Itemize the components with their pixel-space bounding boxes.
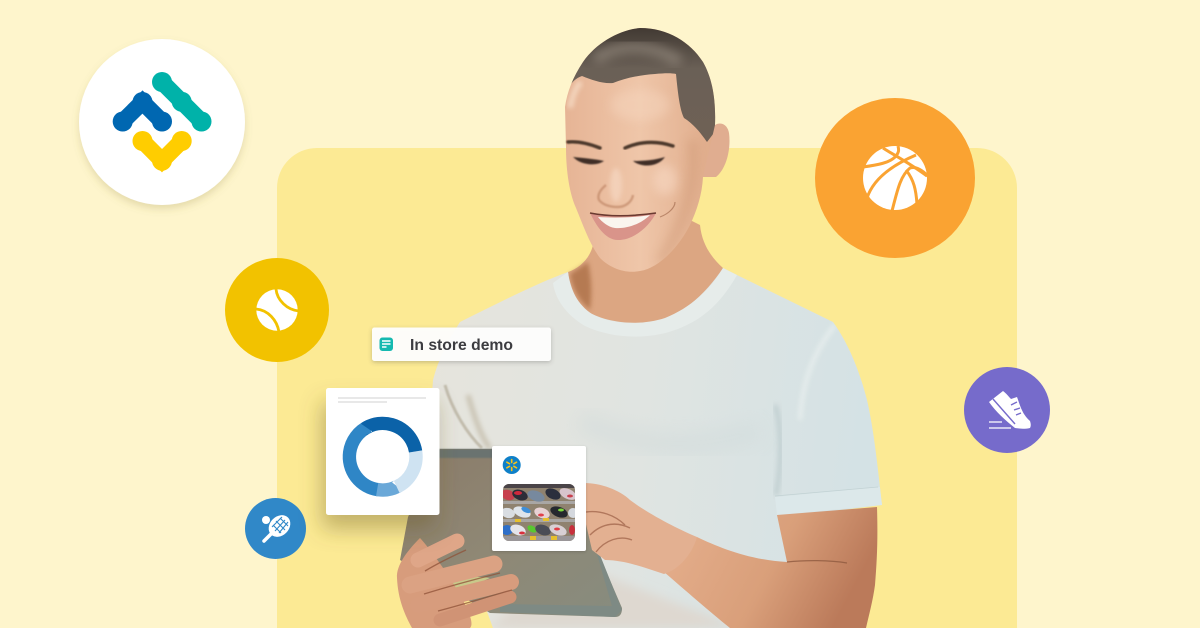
icon: tennis racket <box>245 498 306 559</box>
icon: retailer spark <box>503 456 521 474</box>
panel: yellow backdrop <box>277 148 1017 628</box>
finger 2 <box>410 564 494 585</box>
photo: shoe wall <box>500 484 578 541</box>
finger divisions <box>424 550 512 611</box>
right arm <box>664 507 877 628</box>
finger 3 <box>418 582 511 605</box>
icon: running shoe <box>964 367 1050 453</box>
panel: donut chart card <box>326 388 440 515</box>
neck <box>568 220 723 323</box>
icon: note <box>380 338 393 351</box>
tablet <box>400 449 622 617</box>
panel: retailer product card <box>492 446 586 551</box>
hair <box>571 28 716 142</box>
right hand <box>585 483 697 574</box>
head <box>560 20 729 272</box>
eyes <box>573 157 665 166</box>
white t-shirt <box>428 268 884 628</box>
placeholder heading lines <box>338 397 426 403</box>
icon: basketball <box>815 98 975 258</box>
arm crease <box>787 561 847 563</box>
finger 1 <box>418 541 457 560</box>
donut chart <box>337 411 428 502</box>
logo: teal strand <box>152 72 212 132</box>
left hand <box>397 538 512 628</box>
neck shadow <box>570 262 591 310</box>
callout: in store demo <box>372 328 551 361</box>
ear <box>702 124 729 177</box>
eyebrows <box>568 142 673 148</box>
logo: blue strand <box>113 92 172 132</box>
man with tablet <box>397 20 884 628</box>
finger 4 <box>440 597 510 620</box>
shirt collar <box>553 268 737 337</box>
face <box>565 28 715 272</box>
logo: yellow strand <box>132 131 192 171</box>
callout text: In store demo <box>410 337 513 354</box>
smile <box>590 202 675 240</box>
icon: tennis ball <box>225 258 329 362</box>
logo badge <box>79 39 245 205</box>
nose <box>598 168 633 207</box>
